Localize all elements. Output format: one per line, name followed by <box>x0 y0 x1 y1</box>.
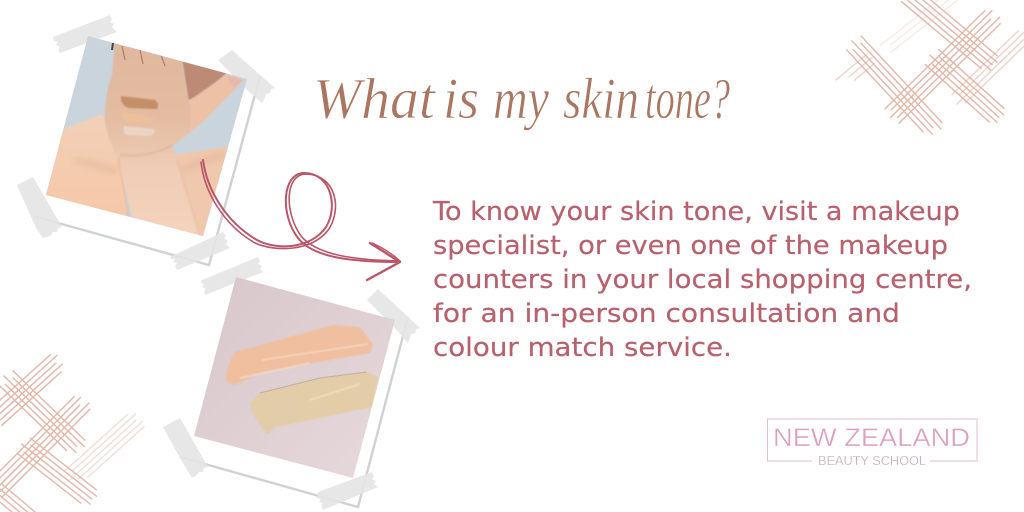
logo: New Zealand Beauty School: NEW ZEALAND <box>773 424 970 452</box>
logo: New Zealand Beauty School <box>768 419 977 468</box>
body text: counters in your local shopping centre, <box>433 265 972 295</box>
swatches on hand <box>121 96 158 136</box>
title: tone? <box>645 66 730 131</box>
smear: peach foundation <box>226 325 373 385</box>
photo: hand with foundation swatches <box>46 36 247 236</box>
photo: foundation smears <box>194 277 395 478</box>
logo: New Zealand Beauty School: BEAUTY SCHOOL <box>818 454 926 468</box>
smear: beige foundation <box>250 372 378 435</box>
tape: photo one <box>17 15 275 270</box>
body text: specialist, or even one of the makeup <box>433 231 948 261</box>
decoration: top-right crosshatch <box>836 0 1024 139</box>
body text: colour match service. <box>433 333 732 363</box>
title <box>313 66 730 131</box>
arrow: looped pointer <box>201 160 400 280</box>
decoration: bottom-left crosshatch <box>0 352 146 512</box>
title: my <box>493 66 549 131</box>
title: skin <box>563 66 639 131</box>
body text: To know your skin tone, visit a makeup <box>432 197 960 227</box>
body text <box>432 197 972 363</box>
polaroid: foundation smears photo <box>163 257 420 510</box>
tape: photo two <box>163 257 420 510</box>
body text: for an in-person consultation and <box>433 299 900 329</box>
title: is <box>443 66 479 131</box>
frame: photo one edge <box>33 76 260 265</box>
frame: photo two edge <box>180 317 408 507</box>
polaroid: hand swatches photo <box>17 15 275 270</box>
title: What <box>313 66 437 131</box>
